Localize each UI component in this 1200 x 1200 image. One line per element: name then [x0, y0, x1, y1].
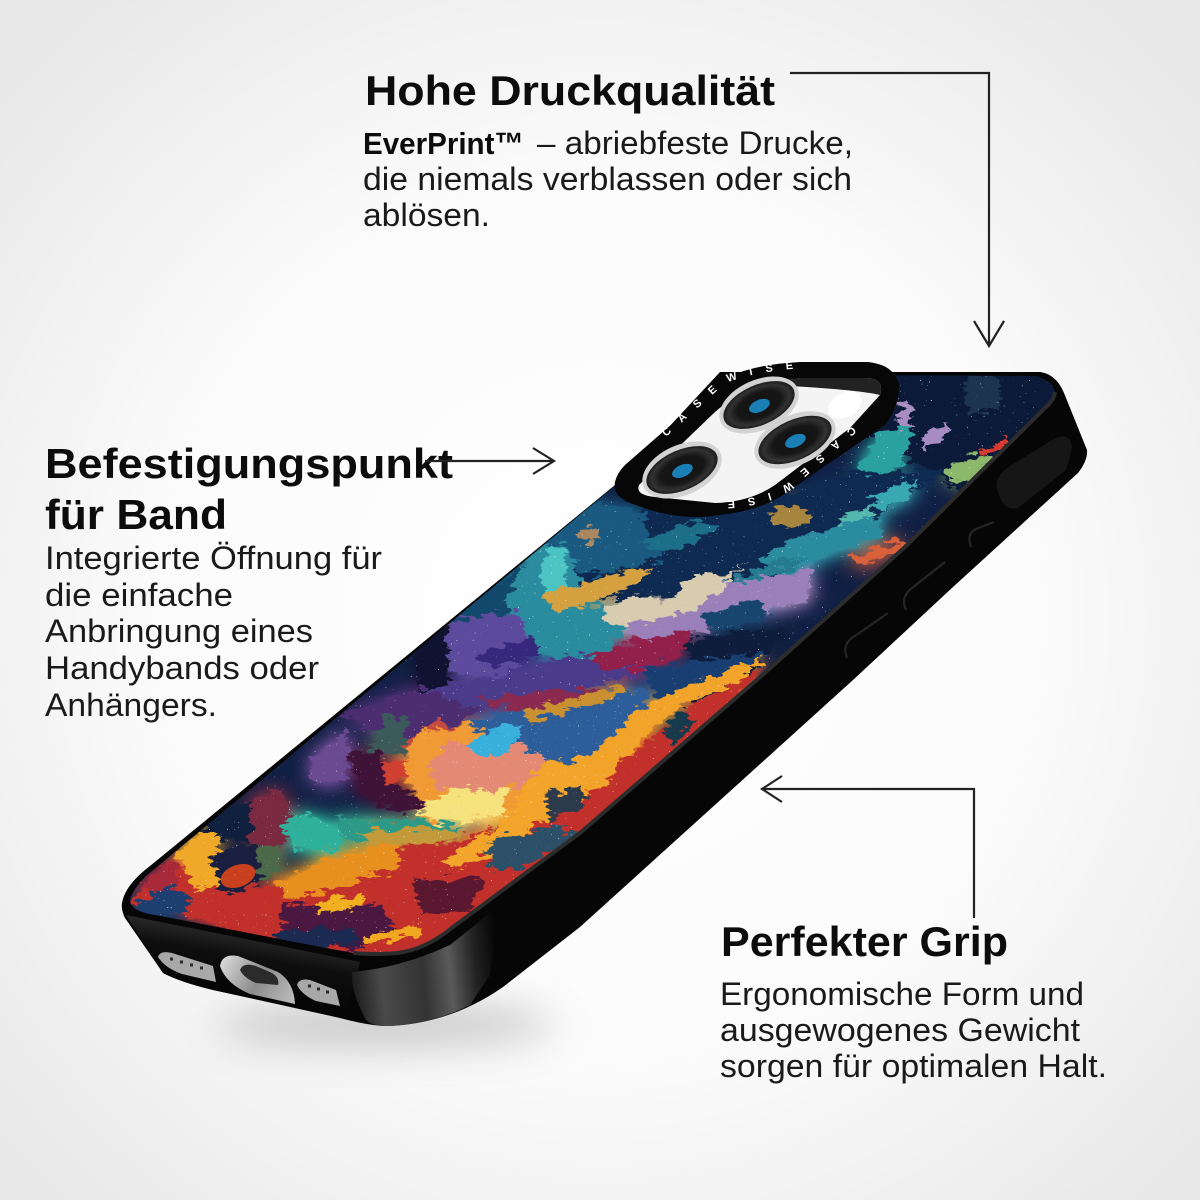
body text — [720, 976, 1107, 1084]
heading: für Band — [45, 491, 227, 538]
body text: ausgewogenes Gewicht — [720, 1012, 1080, 1048]
camera bump — [614, 362, 899, 517]
body text — [45, 540, 382, 723]
bright yellow — [413, 790, 506, 824]
speaker left — [158, 952, 216, 982]
strap opening — [996, 436, 1072, 509]
camera window — [638, 378, 881, 503]
callout: Befestigungspunkt — [45, 440, 453, 723]
maroon lower — [280, 905, 400, 950]
blue corner — [132, 885, 188, 915]
stars — [120, 360, 1070, 960]
arrow: grip — [762, 776, 974, 918]
heading: Perfekter Grip — [721, 918, 1008, 965]
callout: Hohe Druckqualität — [363, 67, 853, 233]
bottom face — [126, 915, 360, 1018]
phone drop shadow — [215, 1001, 555, 1049]
dark maroon cloud — [350, 752, 428, 812]
yellow ring — [178, 832, 222, 890]
lower corner highlight — [352, 905, 500, 1026]
red lower base — [132, 665, 765, 960]
purple streak — [310, 730, 352, 785]
speaker right — [297, 980, 340, 1006]
callout: Perfekter Grip — [720, 918, 1107, 1084]
case body — [122, 372, 1087, 1026]
body text: Anhängers. — [45, 687, 217, 723]
ring lettering bottom: CASEWISE — [728, 428, 856, 508]
lens top — [710, 365, 808, 445]
deep blue — [640, 652, 770, 700]
red left — [140, 858, 178, 895]
yellow streaks — [363, 925, 422, 944]
navy lower — [680, 628, 790, 668]
heading: Hohe Druckqualität — [365, 67, 775, 114]
body text: sorgen für optimalen Halt. — [720, 1048, 1107, 1084]
rim highlight — [353, 392, 1055, 954]
crimson cloud — [587, 630, 690, 672]
teal clouds upper — [857, 425, 912, 475]
lilac mass — [447, 612, 530, 680]
body text: Integrierte Öffnung für — [45, 540, 382, 576]
lavender cloud — [620, 570, 810, 640]
arrow: print quality — [790, 73, 1004, 346]
body text: ablösen. — [363, 197, 490, 233]
purple dark left — [340, 688, 480, 740]
heading — [45, 440, 453, 538]
red inside flame with dark blob — [660, 712, 695, 745]
heading: Befestigungspunkt — [45, 440, 453, 487]
orange right — [568, 652, 774, 802]
dark navy band — [553, 470, 950, 600]
phone case — [122, 362, 1088, 1026]
flash — [823, 386, 867, 424]
body text: Anbringung eines — [45, 613, 313, 649]
body text — [363, 125, 853, 233]
planet red — [220, 864, 256, 888]
lens right — [746, 400, 844, 480]
teal cloud left — [505, 545, 625, 665]
cyan blob — [465, 725, 522, 760]
arrow: strap attachment — [425, 448, 554, 474]
cream cloud — [600, 565, 745, 628]
charging port — [220, 955, 295, 1004]
body text: Handybands oder — [45, 650, 319, 686]
dark left — [197, 802, 252, 842]
ring inner shadow — [725, 378, 881, 400]
red brown — [247, 790, 295, 850]
body text: die niemals verblassen oder sich — [363, 161, 852, 197]
orange flames — [275, 842, 400, 900]
teal green — [280, 815, 340, 850]
ring lettering top: CASEWISE — [662, 362, 793, 436]
body text: Ergonomische Form und — [720, 976, 1084, 1012]
body text: – abriebfeste Drucke, — [537, 125, 853, 161]
teal rim patch — [487, 825, 580, 870]
body text: EverPrint™ — [363, 126, 524, 161]
camera ring — [615, 362, 899, 517]
planet and moon — [771, 506, 811, 528]
orange halo — [397, 725, 525, 825]
blue mid band — [463, 690, 650, 770]
purple band — [420, 645, 655, 715]
lower blue ribbon — [703, 600, 770, 630]
printed artwork — [120, 360, 1070, 960]
peach sky — [427, 740, 550, 795]
blue nebula near camera — [540, 500, 660, 575]
body text: die einfache — [45, 577, 233, 613]
side buttons — [845, 522, 994, 658]
lens left — [633, 430, 731, 510]
upper right night sky — [866, 376, 1055, 492]
orange lower right — [440, 757, 567, 870]
